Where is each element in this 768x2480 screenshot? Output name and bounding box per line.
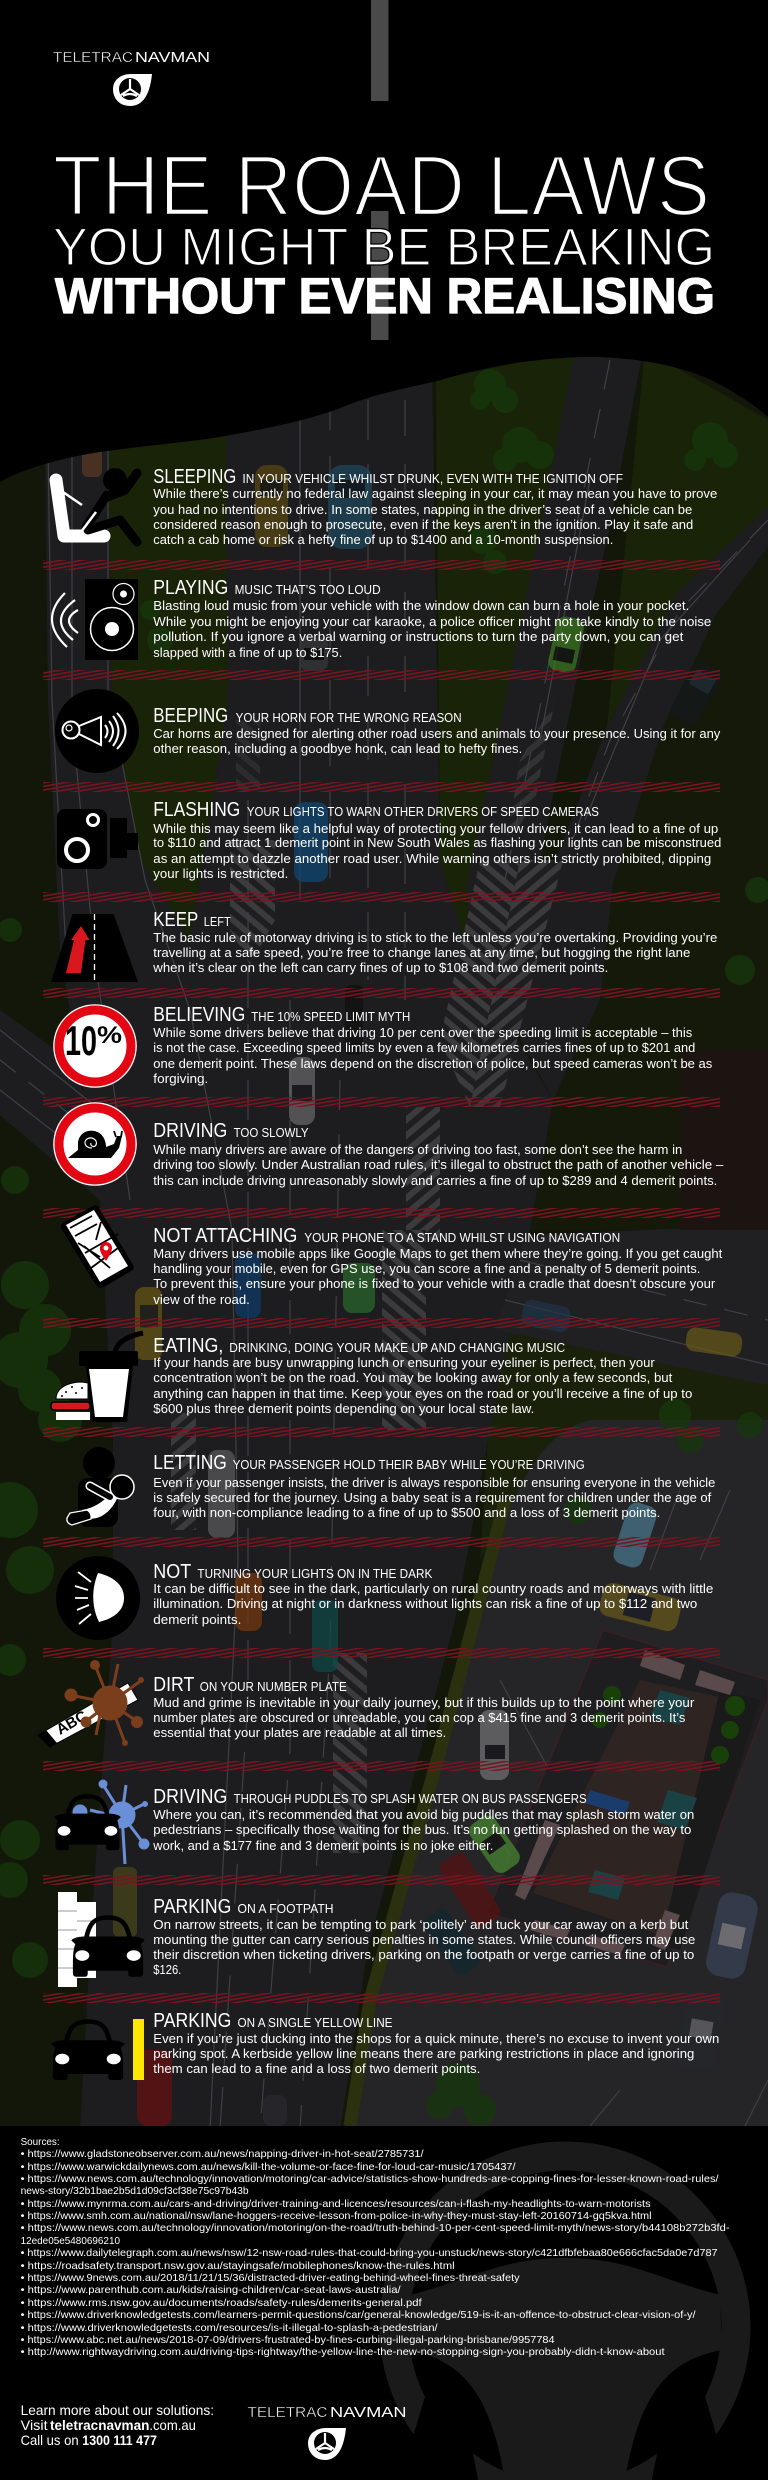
body text: as an attempt to dazzle another road user. While warning others isn’t strictly prohibited, dipping [153,851,711,866]
heading: NOT ATTACHING [153,1225,297,1247]
body text: essential that your plates are readable at all times. [153,1725,446,1740]
icon: car on kerb [58,1892,145,1987]
body text [153,1355,692,1416]
heading [153,1561,433,1583]
heading: PLAYING [153,577,228,599]
heading: YOUR PHONE TO A STAND WHILST USING NAVIGATION [304,1230,620,1245]
sources list: • https://www.news.com.au/technology/innovation/motoring/car-advice/statistics-show-hundreds-are-copping-fines-for-lesser-known-road-rules/ [21,2173,719,2185]
section: parking on a footpath [58,1892,695,1987]
sources list: 12ede05e5480696210 [21,2235,120,2247]
sources list: • https://www.gladstoneobserver.com.au/news/napping-driver-in-hot-seat/2785731/ [21,2148,424,2160]
body text [153,1695,695,1740]
contact details: 1300 111 477 [82,2432,157,2448]
body text [153,821,721,881]
road centre line dashes [371,0,388,340]
heading: THROUGH PUDDLES TO SPLASH WATER ON BUS PASSENGERS [234,1791,587,1806]
heading: YOUR HORN FOR THE WRONG REASON [236,710,462,725]
body text: them can lead to a fine and a loss of two demerit points. [153,2061,480,2076]
section: letting [67,1447,715,1527]
section: flashing [57,799,721,881]
body text [153,1917,695,1977]
contact details: Call us on [21,2432,79,2448]
body text: you had no intentions to drive. In some states, napping in the driver’s seat of a vehicle can be [153,502,692,517]
section: not attaching [61,1205,723,1307]
section: driving too slowly [53,1102,724,1188]
roads [0,340,768,2130]
contact details: Learn more about our solutions: [21,2402,214,2418]
body text: number plates are obscured or unreadable, you can cop a $415 fine and 3 demerit points. It’s [153,1710,686,1725]
body text: While many drivers are aware of the dangers of driving too fast, some don’t see the harm in [153,1142,682,1157]
sources list: • https://www.9news.com.au/2018/11/21/15/36/distracted-driver-eating-behind-wheel-fines-threat-safety [21,2272,520,2284]
hatched red dividers [43,560,720,2003]
heading [153,1335,565,1357]
body text: view of the road. [153,1292,250,1307]
body text [153,1475,715,1520]
heading [153,577,381,599]
sources list: Sources: [21,2136,60,2148]
section: parking on a yellow line [51,2010,719,2080]
sources list: • https://www.mynrma.com.au/cars-and-driving/driver-training-and-licences/resources/can-i-flash-my-headlights-to-warn-motorists [21,2198,651,2210]
body text: four, with non-compliance leading to a fine of up to $500 and a loss of 3 demerit points. [153,1505,660,1520]
body text: work, and a $177 fine and 3 demerit points is no joke either. [152,1838,493,1853]
heading: YOUR PASSENGER HOLD THEIR BABY WHILE YOU’RE DRIVING [233,1457,585,1472]
dark brown plot [680,1225,768,1230]
logo: Teletrac Navman footer: TELETRAC [248,2404,328,2421]
body text: their discretion when ticketing drivers, parking on the footpath or verge carries a fine of up to [153,1947,694,1962]
body text [152,930,717,975]
section: driving through puddles [54,1780,694,1864]
heading [153,1452,585,1474]
body text: On narrow streets, it can be tempting to park ‘politely’ and tuck your car away on a kerb but [153,1917,689,1932]
icon: 10% speed sign: 10 [65,1017,97,1064]
heading: DRIVING [153,1120,227,1142]
icon: muddy number plate [38,1660,144,1747]
body text: While there’s currently no federal law against sleeping in your car, it may mean you have to prove [153,486,717,501]
sources list [21,2136,730,2358]
body text: illumination. Driving at night or in darkness without lights can risk a fine of up to $112 and two [153,1596,697,1611]
trees [0,369,768,2126]
body text: is safely secured for the journey. Using a baby seat is a requirement for children under the age of [153,1490,712,1505]
title: YOU MIGHT BE BREAKING [53,218,715,277]
body text: It can be difficult to see in the dark, particularly on rural country roads and motorways with little [153,1581,713,1596]
sources list: • https://www.parenthub.com.au/kids/raising-children/car-seat-laws-australia/ [21,2284,401,2296]
heading [153,1120,309,1142]
contact details: .com.au [149,2417,196,2433]
section: beeping [55,689,721,773]
heading: YOUR LIGHTS TO WARN OTHER DRIVERS OF SPEED CAMERAS [247,804,599,819]
body text: Even if your passenger insists, the driver is always responsible for ensuring everyone in the vehicle [153,1475,715,1490]
heading: PARKING [153,1896,231,1918]
title: THE ROAD LAWS [53,139,710,234]
body text: $600 plus three demerit points depending on your local state law. [153,1401,534,1416]
logo: Teletrac Navman footer [248,2404,406,2460]
heading: DRINKING, DOING YOUR MAKE UP AND CHANGING MUSIC [229,1340,565,1355]
sources list: • http://www.rightwaydriving.com.au/driving-tips-rightway/the-yellow-line-the-new-no-stopping-sign-you-probably-didn-t-know-about [21,2346,665,2358]
icon: car with water splash [54,1780,149,1864]
heading: PARKING [153,2010,231,2032]
body text: To prevent this, ensure your phone is fixed to your vehicle with a cradle that doesn’t obscure your [153,1276,716,1291]
icon: speaker [52,579,138,660]
body text: Even if you’re just ducking into the shops for a quick minute, there’s no excuse to invent your own [153,2031,719,2046]
body text: concentration won’t be on the road. You may be looking away for only a few seconds, but [153,1370,673,1385]
heading: KEEP [153,909,198,931]
body text [153,598,711,660]
heading [153,1225,620,1247]
icon: muddy number plate: ABC [54,1707,90,1738]
sources list: • https://www.abc.net.au/news/2018-07-09/drivers-frustrated-by-fines-curbing-illegal-parking-brisbane/9957784 [21,2334,555,2346]
icon: speed camera [57,809,138,869]
heading: EATING, [153,1335,223,1357]
steering wheel watermark [394,2156,736,2480]
title: WITHOUT EVEN REALISING [55,268,715,324]
body text: The basic rule of motorway driving is to stick to the left unless you’re overtaking. Providing you’re [153,930,717,945]
body text [152,1807,694,1853]
sources list: • https://www.dailytelegraph.com.au/news/nsw/12-nsw-road-rules-that-could-bring-you-unstuck/news-story/c421dfbfebaa80e666cfac5da0e7d787 [21,2247,718,2259]
logo: Teletrac Navman footer: NAVMAN [330,2404,406,2421]
title [53,139,715,324]
chevron medians [171,700,563,1853]
body text: parking spot. A kerbside yellow line means there are parking restrictions in place and ignoring [153,2046,694,2061]
sources list: news-story/32b1bae2b5d1d09cf3cf38e75c97b43b [21,2185,249,2197]
section: sleeping [56,466,717,547]
heading: TOO SLOWLY [234,1125,309,1140]
heading [153,909,231,931]
body text [153,486,717,547]
green fields [108,358,768,1558]
body text: While some drivers believe that driving 10 per cent over the speeding limit is acceptable – this [153,1025,693,1040]
body text: While this may seem like a helpful way of protecting your fellow drivers, it can lead to a fine of up [153,821,718,836]
heading [153,2010,393,2032]
body text [153,726,721,756]
logo: Teletrac Navman header [53,49,210,106]
body text [153,1246,723,1307]
body text: is not the case. Exceeding speed limits by even a few kilometres carries fines of up to $201 and [153,1040,695,1055]
sources list: • https://www.driverknowledgetests.com/resources/is-it-illegal-to-splash-a-pedestrian/ [21,2322,438,2334]
icon: car by yellow line [51,2019,144,2080]
building [487,1630,768,1967]
section: dirt [38,1660,695,1747]
cars [82,445,760,2126]
body text: when it’s clear on the left can carry fines of up to $108 and two demerit points. [152,960,608,975]
heading [153,1786,587,1808]
body text: Car horns are designed for alerting other road users and animals to your presence. Using it for any [153,726,721,741]
body text [153,2031,719,2076]
body text: slapped with a fine of up to $175. [153,645,342,660]
icon: 10% speed sign: % [97,1022,122,1049]
body text: $126. [153,1962,181,1977]
heading: ON A SINGLE YELLOW LINE [238,2015,393,2030]
sources list: • https://www.driverknowledgetests.com/learners-permit-questions/car/general-knowledge/519-is-it-an-offence-to-obstruct-clear-vision-of-y/ [21,2309,696,2321]
section: believing [53,1004,713,1088]
heading: LEFT [204,914,231,929]
body text: other reason, including a goodbye honk, can lead to hefty fines. [153,741,522,756]
icon: road with red arrow [51,914,138,982]
heading [153,705,462,727]
logo: Teletrac Navman header: TELETRAC [53,49,133,66]
icon: 10% speed sign [53,1004,137,1088]
body text: While you might be enjoying your car karaoke, a police officer might not take kindly to the noise [153,614,711,629]
aerial road map background [0,340,768,2130]
heading [153,799,599,821]
body text: this can include driving unreasonably slowly and carries a fine of up to $289 and 4 demerit points. [153,1173,717,1188]
body text [153,1142,724,1188]
body text [153,1581,713,1627]
section: eating [51,1333,692,1422]
heading: THE 10% SPEED LIMIT MYTH [251,1009,410,1024]
heading: DIRT [153,1674,194,1696]
contact details [21,2402,214,2448]
body text: Where you can, it’s recommended that you avoid big puddles that may splash storm water on [153,1807,694,1822]
icon: snail sign [53,1102,137,1186]
body text: pedestrians – specifically those waiting for the bus. It’s no fun getting splashed on the way to [153,1822,691,1837]
heading: ON YOUR NUMBER PLATE [200,1679,347,1694]
body text [153,1025,713,1086]
sources list: • https://www.warwickdailynews.com.au/news/kill-the-volume-or-face-fine-for-loud-car-music/1705437/ [21,2161,516,2173]
heading: DRIVING [153,1786,227,1808]
heading: TURNING YOUR LIGHTS ON IN THE DARK [197,1566,433,1581]
body text: pollution. If you ignore a verbal warning or instructions to turn the party down, you can get [153,629,684,644]
heading: IN YOUR VEHICLE WHILST DRUNK, EVEN WITH THE IGNITION OFF [242,471,623,486]
heading [153,1674,347,1696]
section: not turning lights on [56,1556,713,1640]
body text: driving too slowly. Under Australian road rules, it’s illegal to obstruct the path of another vehicle – [153,1157,724,1172]
sources list: • https://www.rms.nsw.gov.au/documents/roads/safety-rules/demerits-general.pdf [21,2297,422,2309]
body text: anything can happen in that time. Keep your eyes on the road or you’ll receive a fine of up to [153,1386,692,1401]
sources list: • https://roadsafety.transport.nsw.gov.au/stayingsafe/mobilephones/know-the-rules.html [21,2260,455,2272]
body text: Mud and grime is inevitable in your daily journey, but if this builds up to the point where your [153,1695,695,1710]
contact details: teletracnavman [50,2417,149,2433]
lane lines [0,360,768,2130]
icon: horn [55,689,139,773]
heading: ON A FOOTPATH [238,1901,334,1916]
sources list: • https://www.smh.com.au/national/nsw/lane-hoggers-receive-lesson-from-police-in-why-they-must-stay-left-20160714-gq5kva.html [21,2210,652,2222]
heading: NOT [153,1561,191,1583]
icon: driver in seat [56,468,137,542]
body text: If your hands are busy unwrapping lunch or ensuring your eyeliner is perfect, then your [153,1355,655,1370]
body text: forgiving. [153,1071,208,1086]
heading: MUSIC THAT’S TOO LOUD [235,582,381,597]
heading [153,1004,410,1026]
heading: LETTING [153,1452,227,1474]
body text: mounting the gutter can carry serious penalties in some states. While council officers may use [153,1932,695,1947]
icon: phone with map [61,1205,134,1288]
heading: FLASHING [153,799,240,821]
body text: one demerit point. These laws depend on the discretion of police, but speed cameras won’t be as [153,1056,713,1071]
heading: BEEPING [153,705,228,727]
body text: demerit points. [153,1612,241,1627]
body text: travelling at a safe speed, you’re free to change lanes at any time, but hogging the right lane [153,945,690,960]
olive verge [350,1500,505,2126]
icon: burger and drink [51,1333,143,1422]
body text: considered reason enough to prosecute, even if the keys aren’t in the ignition. Play it safe and [153,517,693,532]
icon: headlight [56,1556,140,1640]
body text: your lights is restricted. [153,866,288,881]
logo: Teletrac Navman header: NAVMAN [135,49,210,66]
section: keep left [51,909,717,982]
body text: handling your mobile, even for GPS use, you can score a fine and a penalty of 5 demerit points. [153,1261,700,1276]
body text: to $110 and attract 1 demerit point in New South Wales as flashing your lights can be misconstrued [153,835,721,850]
contact details: Visit [21,2417,48,2433]
body text: Blasting loud music from your vehicle with the window down can burn a hole in your pocket. [153,598,689,613]
icon: passenger holding baby [67,1447,134,1527]
body text: catch a cab home or risk a hefty fine of up to $1400 and a 10-month suspension. [153,532,613,547]
heading: SLEEPING [153,466,236,488]
sources list: • https://www.news.com.au/technology/innovation/motoring/on-the-road/truth-behind-10-per-cent-speed-limit-myth/news-story/b44108b272b3fd- [21,2222,730,2234]
heading: BELIEVING [153,1004,245,1026]
heading [153,466,623,488]
heading [153,1896,334,1918]
body text: Many drivers use mobile apps like Google Maps to get them where they’re going. If you get caught [153,1246,723,1261]
section: playing [52,577,711,660]
